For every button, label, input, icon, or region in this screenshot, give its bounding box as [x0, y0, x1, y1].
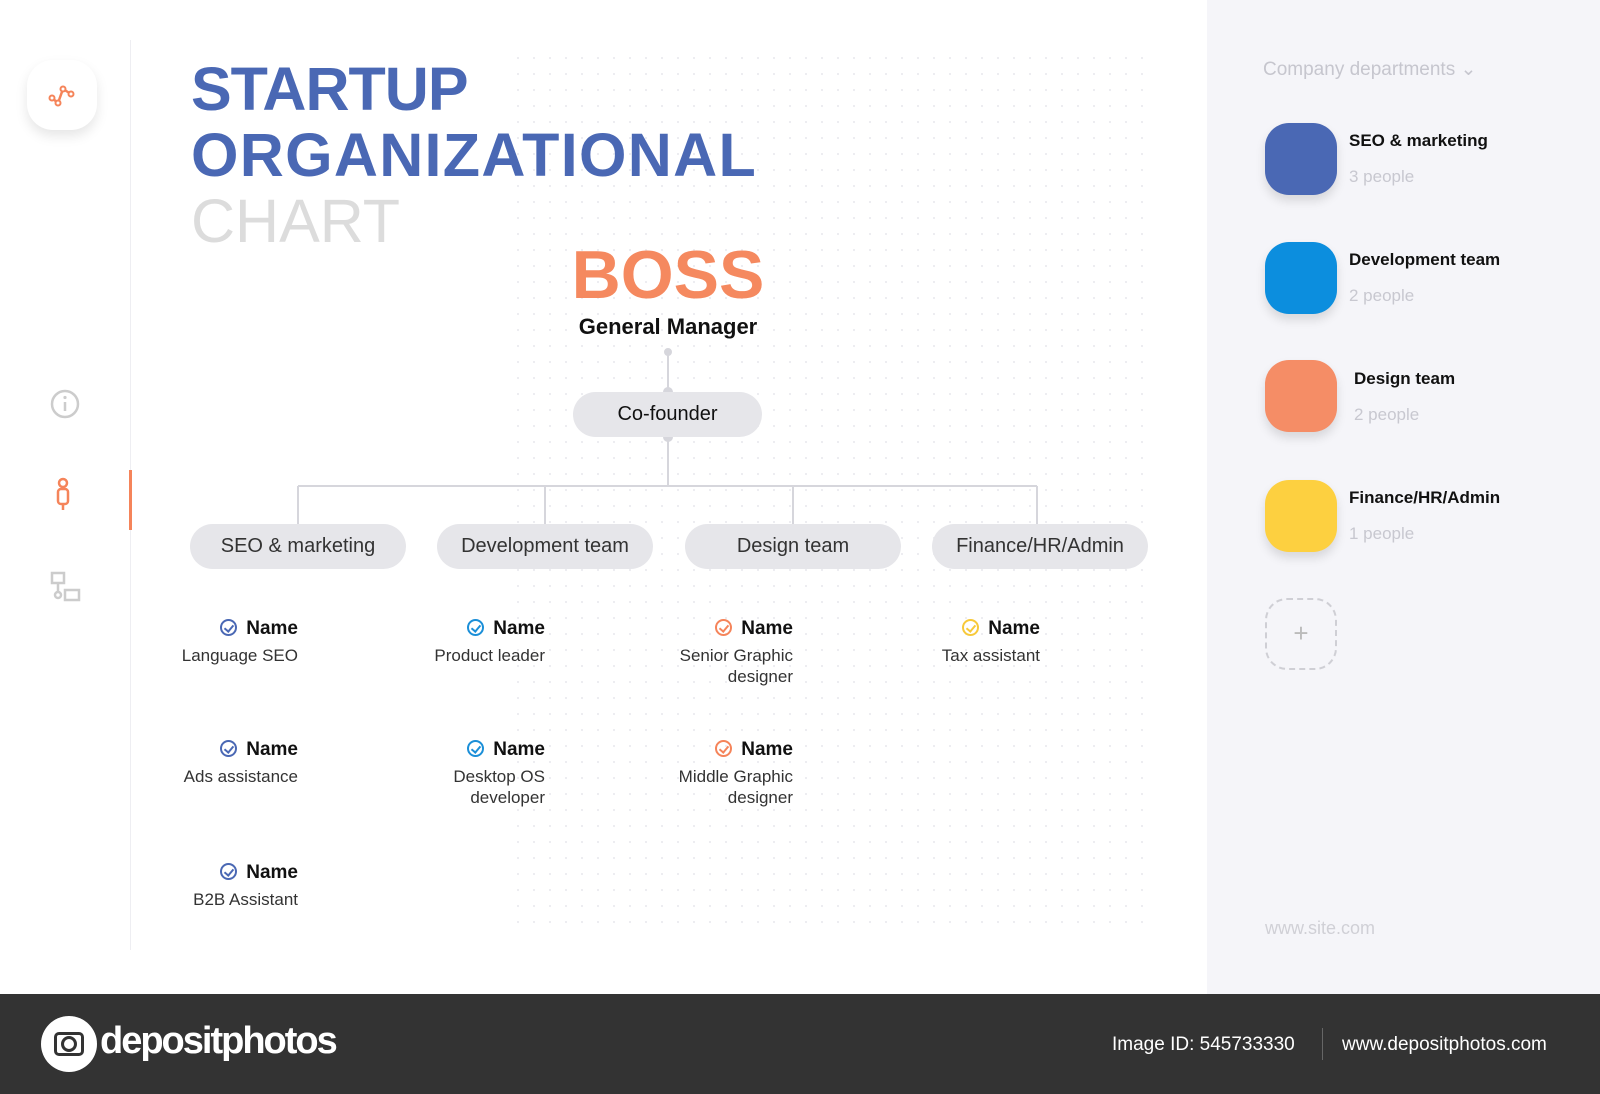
text: 2 people — [1354, 405, 1419, 424]
footer id: Image ID: 545733330 — [1112, 1034, 1295, 1055]
site url: www.site.com — [1265, 918, 1375, 938]
text: 2 people — [1349, 286, 1414, 305]
footer bar: depositphotos — [100, 1020, 336, 1062]
dept: Finance — [932, 524, 1148, 569]
member SEO 3: Name — [246, 862, 298, 883]
member Dev 1: Product leader — [434, 646, 545, 665]
title: STARTUP — [191, 55, 468, 123]
icon: folders — [50, 572, 80, 602]
dept: Development team: Development team — [461, 535, 629, 557]
legend: SEO — [1265, 123, 1337, 195]
add button — [1265, 598, 1337, 670]
right panel — [1207, 0, 1600, 994]
dept: Design team: Design team — [737, 535, 849, 557]
legend: Finance — [1265, 480, 1337, 552]
footer bar — [0, 994, 1600, 1094]
legend: Dev — [1265, 242, 1337, 314]
dropdown: company departments: Company departments ⌄ — [1263, 59, 1476, 80]
dept: Development team — [437, 524, 653, 569]
dept: Design team — [685, 524, 901, 569]
member Design 2: Middle Graphic — [679, 767, 793, 786]
member SEO 2 — [184, 739, 298, 786]
dept: Finance: Finance/HR/Admin — [956, 535, 1124, 557]
member Design 2: Name — [741, 739, 793, 760]
boss heading: BOSS — [572, 237, 764, 313]
general manager: General Manager — [579, 314, 757, 339]
member Dev 1 — [434, 618, 545, 665]
dept: SEO & marketing: SEO & marketing — [221, 535, 375, 557]
member Dev 2 — [453, 739, 545, 807]
text: Design team — [1354, 369, 1455, 388]
text: Finance/HR/Admin — [1349, 488, 1500, 507]
member Design 2: designer — [728, 788, 793, 807]
member SEO 1: Language SEO — [182, 646, 298, 665]
member SEO 3 — [193, 862, 298, 909]
background dot grid — [510, 50, 1150, 930]
dept: SEO & marketing — [190, 524, 406, 569]
member Finance 1: Tax assistant — [942, 646, 1040, 665]
member SEO 2: Name — [246, 739, 298, 760]
member Finance 1 — [942, 618, 1040, 665]
member Design 1: Senior Graphic — [680, 646, 793, 665]
member Design 1: Name — [741, 618, 793, 639]
member SEO 1: Name — [246, 618, 298, 639]
member Design 1: designer — [728, 667, 793, 686]
member Dev 2: Desktop OS — [453, 767, 545, 786]
text: 1 people — [1349, 524, 1414, 543]
add button: + — [1293, 618, 1309, 648]
footer logo — [41, 1016, 97, 1072]
icon: person — [56, 478, 70, 510]
co-founder node: Co-founder — [617, 403, 718, 425]
member SEO 3: B2B Assistant — [193, 890, 298, 909]
title: ORGANIZATIONAL — [191, 121, 757, 189]
text: Development team — [1349, 250, 1500, 269]
member Dev 2: Name — [493, 739, 545, 760]
title: CHART — [191, 187, 400, 255]
icon: chart logo button — [27, 60, 97, 130]
legend: Design — [1265, 360, 1337, 432]
member Finance 1: Name — [988, 618, 1040, 639]
member SEO 1 — [182, 618, 298, 665]
sidebar active marker — [129, 470, 132, 530]
text: 3 people — [1349, 167, 1414, 186]
co-founder node — [573, 392, 762, 437]
member Design 2 — [679, 739, 793, 807]
member Dev 2: developer — [470, 788, 545, 807]
member Dev 1: Name — [493, 618, 545, 639]
sidebar divider — [130, 40, 131, 950]
text: SEO & marketing — [1349, 131, 1488, 150]
member SEO 2: Ads assistance — [184, 767, 298, 786]
member Design 1 — [680, 618, 793, 686]
footer bar: www.depositphotos.com — [1342, 1034, 1547, 1055]
icon: info — [50, 390, 80, 418]
connectors — [297, 348, 1038, 524]
title — [191, 55, 757, 255]
